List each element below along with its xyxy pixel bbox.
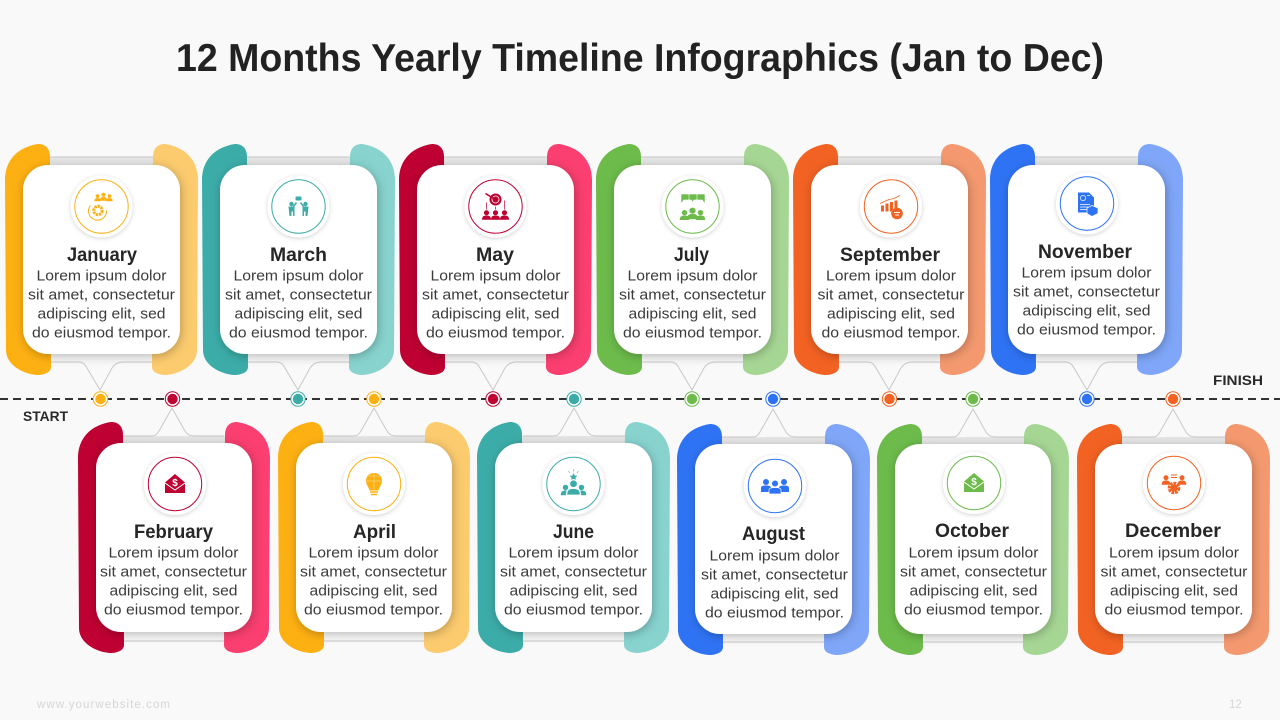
description: sit amet, consectetur xyxy=(500,564,647,580)
description: adipiscing elit, sed xyxy=(827,306,955,322)
icon: money envelope: $ xyxy=(971,477,977,488)
icon: discussion xyxy=(268,176,330,238)
description: Lorem ipsum dolor xyxy=(234,268,364,284)
month name: June xyxy=(553,522,594,543)
description: sit amet, consectetur xyxy=(701,566,848,584)
card body xyxy=(614,165,771,354)
month name: February xyxy=(134,522,213,543)
description: adipiscing elit, sed xyxy=(1110,582,1238,600)
description xyxy=(701,548,848,622)
description: do eiusmod tempor. xyxy=(32,324,171,342)
panel: September xyxy=(793,144,986,390)
icon: chat and team xyxy=(662,176,724,238)
card body xyxy=(811,165,968,354)
description: Lorem ipsum dolor xyxy=(308,544,439,562)
icon: gear and people xyxy=(1143,452,1205,514)
month name: December xyxy=(1125,521,1222,542)
description xyxy=(225,268,372,342)
label: finish: FINISH xyxy=(1213,372,1263,388)
description: adipiscing elit, sed xyxy=(110,582,238,600)
month name: May xyxy=(476,245,514,266)
card body xyxy=(1095,444,1252,634)
description: do eiusmod tempor. xyxy=(822,324,960,342)
description: adipiscing elit, sed xyxy=(710,586,838,602)
description: Lorem ipsum dolor xyxy=(430,268,561,284)
description: Lorem ipsum dolor xyxy=(108,544,239,562)
description: Lorem ipsum dolor xyxy=(908,544,1039,562)
description: sit amet, consectetur xyxy=(1013,284,1160,300)
icon: light bulb xyxy=(343,453,405,515)
description: do eiusmod tempor. xyxy=(1017,322,1156,338)
panel: December xyxy=(1077,409,1270,655)
description: Lorem ipsum dolor xyxy=(628,268,758,284)
footer website: www.yourwebsite.com xyxy=(36,699,170,711)
description: adipiscing elit, sed xyxy=(310,582,438,600)
description: Lorem ipsum dolor xyxy=(1109,544,1239,562)
label: start: START xyxy=(23,408,68,424)
description: do eiusmod tempor. xyxy=(504,602,643,618)
description: adipiscing elit, sed xyxy=(432,306,560,322)
description xyxy=(900,544,1047,618)
panel: July xyxy=(596,144,789,390)
icon: growth chart xyxy=(860,176,922,238)
description: sit amet, consectetur xyxy=(300,564,447,580)
panel: April xyxy=(278,408,470,653)
description: do eiusmod tempor. xyxy=(1104,602,1244,618)
month name: September xyxy=(840,245,941,266)
card body xyxy=(417,165,574,354)
icon: star team xyxy=(542,453,604,515)
description: do eiusmod tempor. xyxy=(104,602,243,618)
title: 12 Months Yearly Timeline Infographics (Jan to Dec) xyxy=(176,37,1104,80)
description: do eiusmod tempor. xyxy=(304,602,443,618)
icon: money envelope xyxy=(943,452,1005,514)
description: do eiusmod tempor. xyxy=(623,324,762,342)
card body xyxy=(296,443,452,632)
description: do eiusmod tempor. xyxy=(705,604,844,622)
panel: March xyxy=(202,144,395,390)
description: sit amet, consectetur xyxy=(100,564,247,580)
description: adipiscing elit, sed xyxy=(234,306,362,322)
page number: 12 xyxy=(1229,699,1242,711)
panel: May xyxy=(399,144,592,390)
description: Lorem ipsum dolor xyxy=(1022,264,1152,282)
icon: document and box xyxy=(1056,172,1118,234)
panel: January xyxy=(5,144,198,390)
description: sit amet, consectetur xyxy=(422,286,569,304)
icon: team xyxy=(744,455,806,517)
panel: June xyxy=(477,408,670,653)
description: adipiscing elit, sed xyxy=(1022,302,1150,320)
description: Lorem ipsum dolor xyxy=(826,268,956,284)
panel: October xyxy=(877,409,1069,655)
description: sit amet, consectetur xyxy=(1100,564,1248,580)
card body xyxy=(220,165,377,354)
description: Lorem ipsum dolor xyxy=(710,548,840,564)
month name: November xyxy=(1038,242,1133,263)
description xyxy=(100,544,247,618)
description: do eiusmod tempor. xyxy=(904,602,1043,618)
panel: February xyxy=(78,408,270,653)
panel: August xyxy=(677,409,870,655)
description: sit amet, consectetur xyxy=(900,564,1047,580)
description xyxy=(818,268,964,342)
description xyxy=(1100,544,1248,618)
timeline markers xyxy=(93,392,1180,406)
icon: money envelope: $ xyxy=(172,478,178,489)
card body xyxy=(1008,165,1165,354)
timeline dashed line xyxy=(0,398,1280,400)
card body xyxy=(895,444,1051,634)
card body xyxy=(695,444,852,634)
icon: target and team xyxy=(464,176,526,238)
description: adipiscing elit, sed xyxy=(628,306,756,322)
description: sit amet, consectetur xyxy=(28,286,175,304)
card body xyxy=(23,165,180,354)
description: adipiscing elit, sed xyxy=(910,582,1038,600)
description xyxy=(1013,264,1160,338)
card body xyxy=(96,443,252,632)
description xyxy=(422,268,569,342)
month name: October xyxy=(935,521,1010,542)
month name: August xyxy=(742,524,806,545)
month name: March xyxy=(270,245,327,266)
description: sit amet, consectetur xyxy=(225,286,372,304)
description xyxy=(500,544,647,618)
panel: November xyxy=(990,144,1183,390)
description: sit amet, consectetur xyxy=(818,286,964,304)
description xyxy=(300,544,447,618)
description: adipiscing elit, sed xyxy=(510,582,638,600)
description: sit amet, consectetur xyxy=(619,286,766,304)
description: do eiusmod tempor. xyxy=(426,324,565,342)
description: Lorem ipsum dolor xyxy=(36,268,167,284)
month name: January xyxy=(67,245,137,266)
description xyxy=(619,268,766,342)
description xyxy=(28,268,175,342)
description: Lorem ipsum dolor xyxy=(508,544,639,562)
description: do eiusmod tempor. xyxy=(229,324,368,342)
icon: money envelope xyxy=(144,453,206,515)
description: adipiscing elit, sed xyxy=(38,306,166,322)
month name: July xyxy=(674,245,709,266)
icon: gear and team xyxy=(70,176,132,238)
card body xyxy=(495,443,652,632)
month name: April xyxy=(353,522,396,543)
